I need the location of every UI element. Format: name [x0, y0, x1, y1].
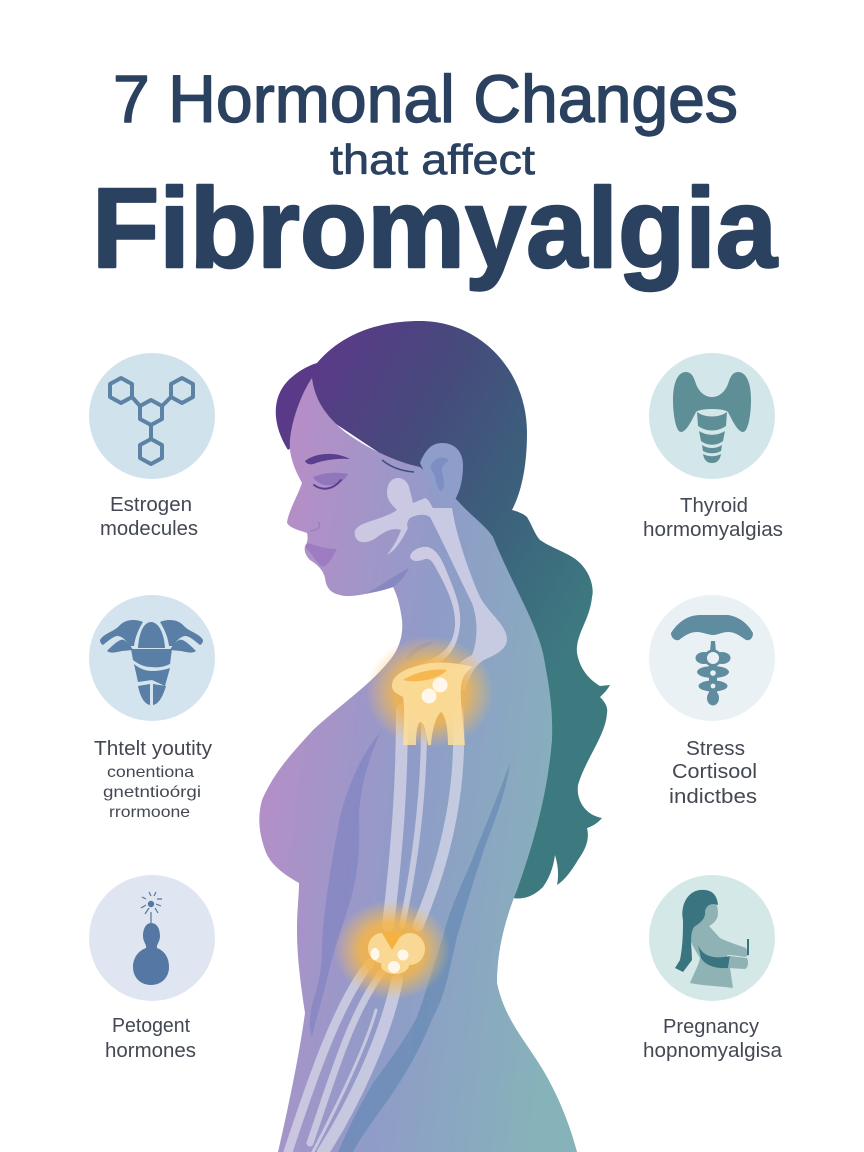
label	[100, 494, 198, 540]
icon: thyroid gland	[673, 372, 751, 463]
label: modecules	[100, 518, 198, 540]
muscle shadow: front	[310, 733, 380, 1037]
title line 2: that affect	[330, 136, 535, 183]
panel: youth hormone	[89, 595, 215, 821]
label: Thyroid	[680, 495, 748, 517]
body silhouette	[259, 378, 577, 1152]
forearm bones lower	[288, 963, 397, 1152]
hair	[276, 321, 610, 898]
icon: glandular torso	[100, 620, 203, 705]
icon: pregnant woman	[675, 890, 749, 988]
elbow pain points	[370, 948, 408, 973]
label: Thtelt youtity	[94, 738, 212, 760]
eyebrow	[305, 454, 350, 464]
circle	[89, 595, 215, 721]
hyoid bone	[401, 547, 460, 684]
label	[643, 1016, 783, 1062]
neck crease	[406, 642, 434, 661]
label: indictbes	[669, 786, 757, 808]
label: hormomyalgias	[643, 519, 783, 541]
label: Pregnancy	[663, 1016, 759, 1038]
label: Stress	[686, 738, 745, 760]
label	[643, 495, 783, 541]
label: hormones	[105, 1040, 196, 1062]
jaw and spine bones	[355, 478, 507, 690]
circle	[89, 875, 215, 1001]
label: Cortisool	[672, 761, 757, 783]
circle	[649, 353, 775, 479]
ear	[420, 443, 463, 508]
label	[105, 1015, 196, 1062]
title line 3: Fibromyalgia	[92, 165, 778, 291]
panel: stress cortisol	[649, 595, 775, 808]
label: gnetntioórgi	[103, 784, 201, 801]
figure: woman in profile	[259, 321, 610, 1152]
icon: adrenal and spine	[671, 615, 753, 706]
shoulder pain points	[422, 678, 448, 704]
hair wisp	[382, 460, 414, 472]
title	[92, 62, 778, 291]
panel: pregnancy	[643, 875, 783, 1062]
icon: molecule	[110, 378, 193, 464]
label: hopnomyalgisa	[643, 1040, 783, 1062]
chin shadow	[365, 568, 409, 594]
elbow joint	[368, 933, 425, 974]
circle	[649, 875, 775, 1001]
title line 1: 7 Hormonal Changes	[113, 62, 738, 137]
shoulder joint bone	[392, 663, 473, 745]
circle	[649, 595, 775, 721]
lips	[306, 544, 337, 567]
circle	[89, 353, 215, 479]
muscle shadow: back	[338, 763, 510, 1152]
forearm bones upper	[388, 710, 459, 926]
panel: thyroid	[643, 353, 783, 541]
nose detail	[310, 522, 319, 531]
icon holes	[707, 652, 719, 688]
label	[669, 738, 757, 808]
shoulder joint opening	[403, 669, 447, 681]
label: conentiona	[107, 764, 194, 781]
label: Estrogen	[110, 494, 192, 516]
label: rrormoone	[109, 804, 190, 821]
label: Petogent	[112, 1015, 190, 1037]
icon: gourd flask with spark	[133, 892, 169, 985]
panel: petogent hormones	[89, 875, 215, 1062]
closed eye	[314, 480, 341, 489]
eyelid	[313, 473, 348, 485]
shoulder glow	[366, 636, 494, 748]
panel: estrogen molecules	[89, 353, 215, 540]
elbow glow	[334, 900, 450, 1000]
elbow notch	[382, 933, 402, 950]
label	[94, 738, 212, 821]
